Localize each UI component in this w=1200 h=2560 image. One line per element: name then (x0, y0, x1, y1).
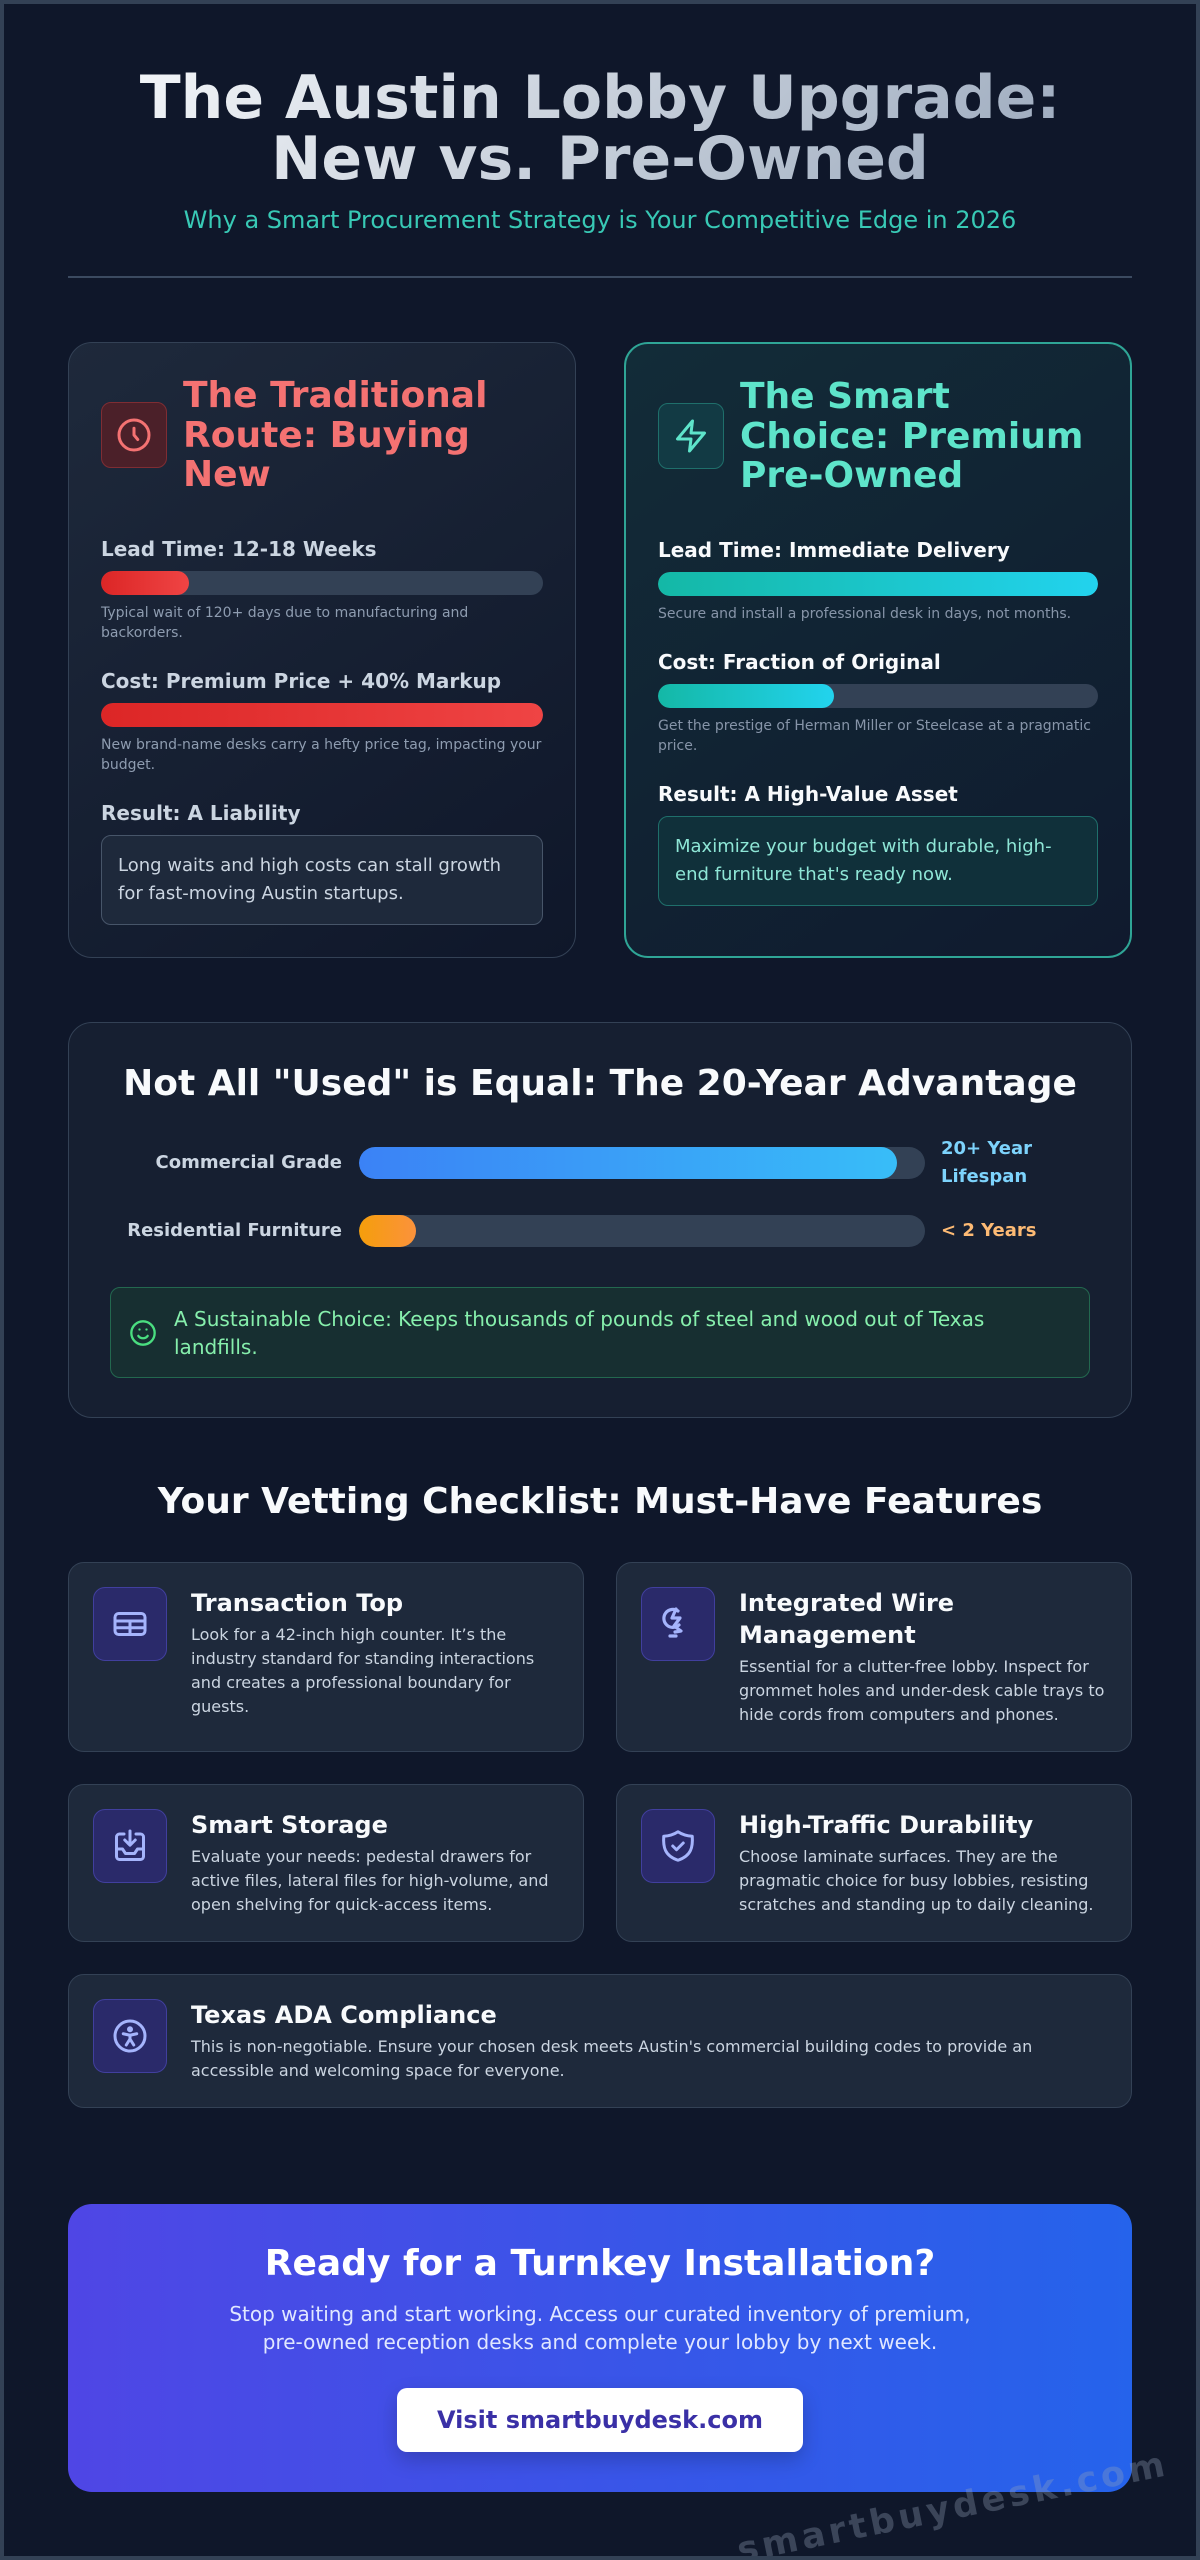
cta body text: Stop waiting and start working. Access our curated inventory of premium, (229, 2302, 971, 2326)
metric: lead time 12-18 weeks: Lead Time: 12-18 Weeks (101, 537, 377, 561)
title: The Austin Lobby Upgrade: (140, 63, 1060, 133)
metric: cost premium price: New brand-name desks carry a hefty price tag, impacting your budget. (101, 737, 541, 773)
row label: residential furniture: Residential Furniture (127, 1220, 342, 1241)
feature card: integrated wire management: Integrated Wire Management (739, 1589, 954, 1649)
metric: lead time immediate delivery: Secure and install a professional desk in days, not months. (658, 606, 1071, 622)
title: New vs. Pre-Owned (271, 124, 929, 194)
callout: sustainable choice (110, 1287, 1090, 1378)
cta button (397, 2388, 803, 2452)
panel: smart choice premium pre-owned (624, 342, 1132, 958)
feature card: smart storage (68, 1784, 584, 1942)
panel heading: smart choice: The Smart Choice: Premium Pre-Owned (740, 376, 1083, 496)
feature card: high-traffic durability (616, 1784, 1132, 1942)
icon: counter top (93, 1587, 167, 1661)
metric: lead time immediate delivery: Lead Time: Immediate Delivery (658, 538, 1010, 562)
page frame edge (0, 2556, 1200, 2560)
icon: lightning bolt (658, 403, 724, 469)
metric: cost fraction of original (658, 650, 1098, 754)
icon: shield check (641, 1809, 715, 1883)
call to action panel (68, 2204, 1132, 2492)
metric: cost premium price: Cost: Premium Price + 40% Markup (101, 669, 501, 693)
feature card: smart storage: Smart Storage (191, 1811, 388, 1839)
metric: lead time immediate delivery (658, 538, 1098, 622)
panel heading: traditional route: The Traditional Route: Buying New (183, 375, 487, 495)
result: a high-value asset: Result: A High-Value Asset (658, 782, 958, 806)
icon: wire grommet (641, 1587, 715, 1661)
feature card: high-traffic durability: Choose laminate surfaces. They are the pragmatic choice for busy lobbies, resisting scratches and standing up to daily cleaning. (739, 1847, 1094, 1914)
icon: inbox download (93, 1809, 167, 1883)
callout: sustainable choice: A Sustainable Choice: Keeps thousands of pounds of steel and wood out of Texas landfills. (174, 1306, 984, 1358)
feature card: smart storage: Evaluate your needs: pedestal drawers for active files, lateral files for high-volume, and open shelving for quick-access items. (191, 1847, 549, 1914)
panel: the 20-year advantage (68, 1022, 1132, 1418)
feature card: transaction top: Transaction Top (191, 1589, 403, 1617)
metric: cost fraction of original: Cost: Fraction of Original (658, 650, 941, 674)
cta heading: Ready for a Turnkey Installation? (265, 2243, 935, 2284)
result: a liability (101, 801, 543, 925)
feature card: texas ada compliance: Texas ADA Compliance (191, 2001, 497, 2029)
cta button: Visit smartbuydesk.com (437, 2406, 763, 2434)
feature card: transaction top (68, 1562, 584, 1752)
metric: lead time 12-18 weeks: Typical wait of 120+ days due to manufacturing and backorders. (101, 605, 468, 641)
result: a liability: Long waits and high costs can stall growth for fast-moving Austin startups. (118, 855, 501, 904)
result: a liability: Result: A Liability (101, 801, 301, 825)
cta body text (229, 2302, 971, 2354)
section heading: 20-year advantage: Not All "Used" is Equal: The 20-Year Advantage (123, 1063, 1077, 1104)
value: 20+ year lifespan: 20+ Year Lifespan (941, 1138, 1032, 1187)
feature card: texas ada compliance (68, 1974, 1132, 2108)
result: a high-value asset: Maximize your budget with durable, high-end furniture that's ready now. (675, 836, 1052, 885)
feature card: integrated wire management (616, 1562, 1132, 1752)
icon: accessibility (93, 1999, 167, 2073)
feature card: transaction top: Look for a 42-inch high counter. It’s the industry standard for standing interactions and creates a professional boundary for guests. (191, 1625, 534, 1716)
panel: traditional route buying new (68, 342, 576, 958)
value: under 2 years: < 2 Years (941, 1220, 1036, 1241)
section heading: vetting checklist: Your Vetting Checklist: Must-Have Features (158, 1481, 1042, 1522)
feature card: texas ada compliance: This is non-negotiable. Ensure your chosen desk meets Austin's commercial building codes to provide an accessible and welcoming space for everyone. (191, 2037, 1032, 2080)
icon: smiley (130, 1320, 156, 1346)
metric: cost premium price (101, 669, 543, 773)
title (68, 68, 1132, 190)
subtitle: Why a Smart Procurement Strategy is Your Competitive Edge in 2026 (184, 206, 1016, 234)
metric: cost fraction of original: Get the prestige of Herman Miller or Steelcase at a pragmatic price. (658, 718, 1091, 754)
result: a high-value asset (658, 782, 1098, 906)
icon: clock (101, 402, 167, 468)
row label: commercial grade: Commercial Grade (156, 1152, 342, 1173)
bar: commercial grade lifespan (359, 1147, 925, 1179)
feature card: integrated wire management: Essential for a clutter-free lobby. Inspect for grommet holes and under-desk cable trays to hide cords from computers and phones. (739, 1657, 1104, 1724)
feature card: high-traffic durability: High-Traffic Durability (739, 1811, 1033, 1839)
metric: lead time 12-18 weeks (100, 537, 543, 641)
cta body text: pre-owned reception desks and complete your lobby by next week. (263, 2330, 937, 2354)
bar: residential furniture lifespan (359, 1215, 925, 1247)
